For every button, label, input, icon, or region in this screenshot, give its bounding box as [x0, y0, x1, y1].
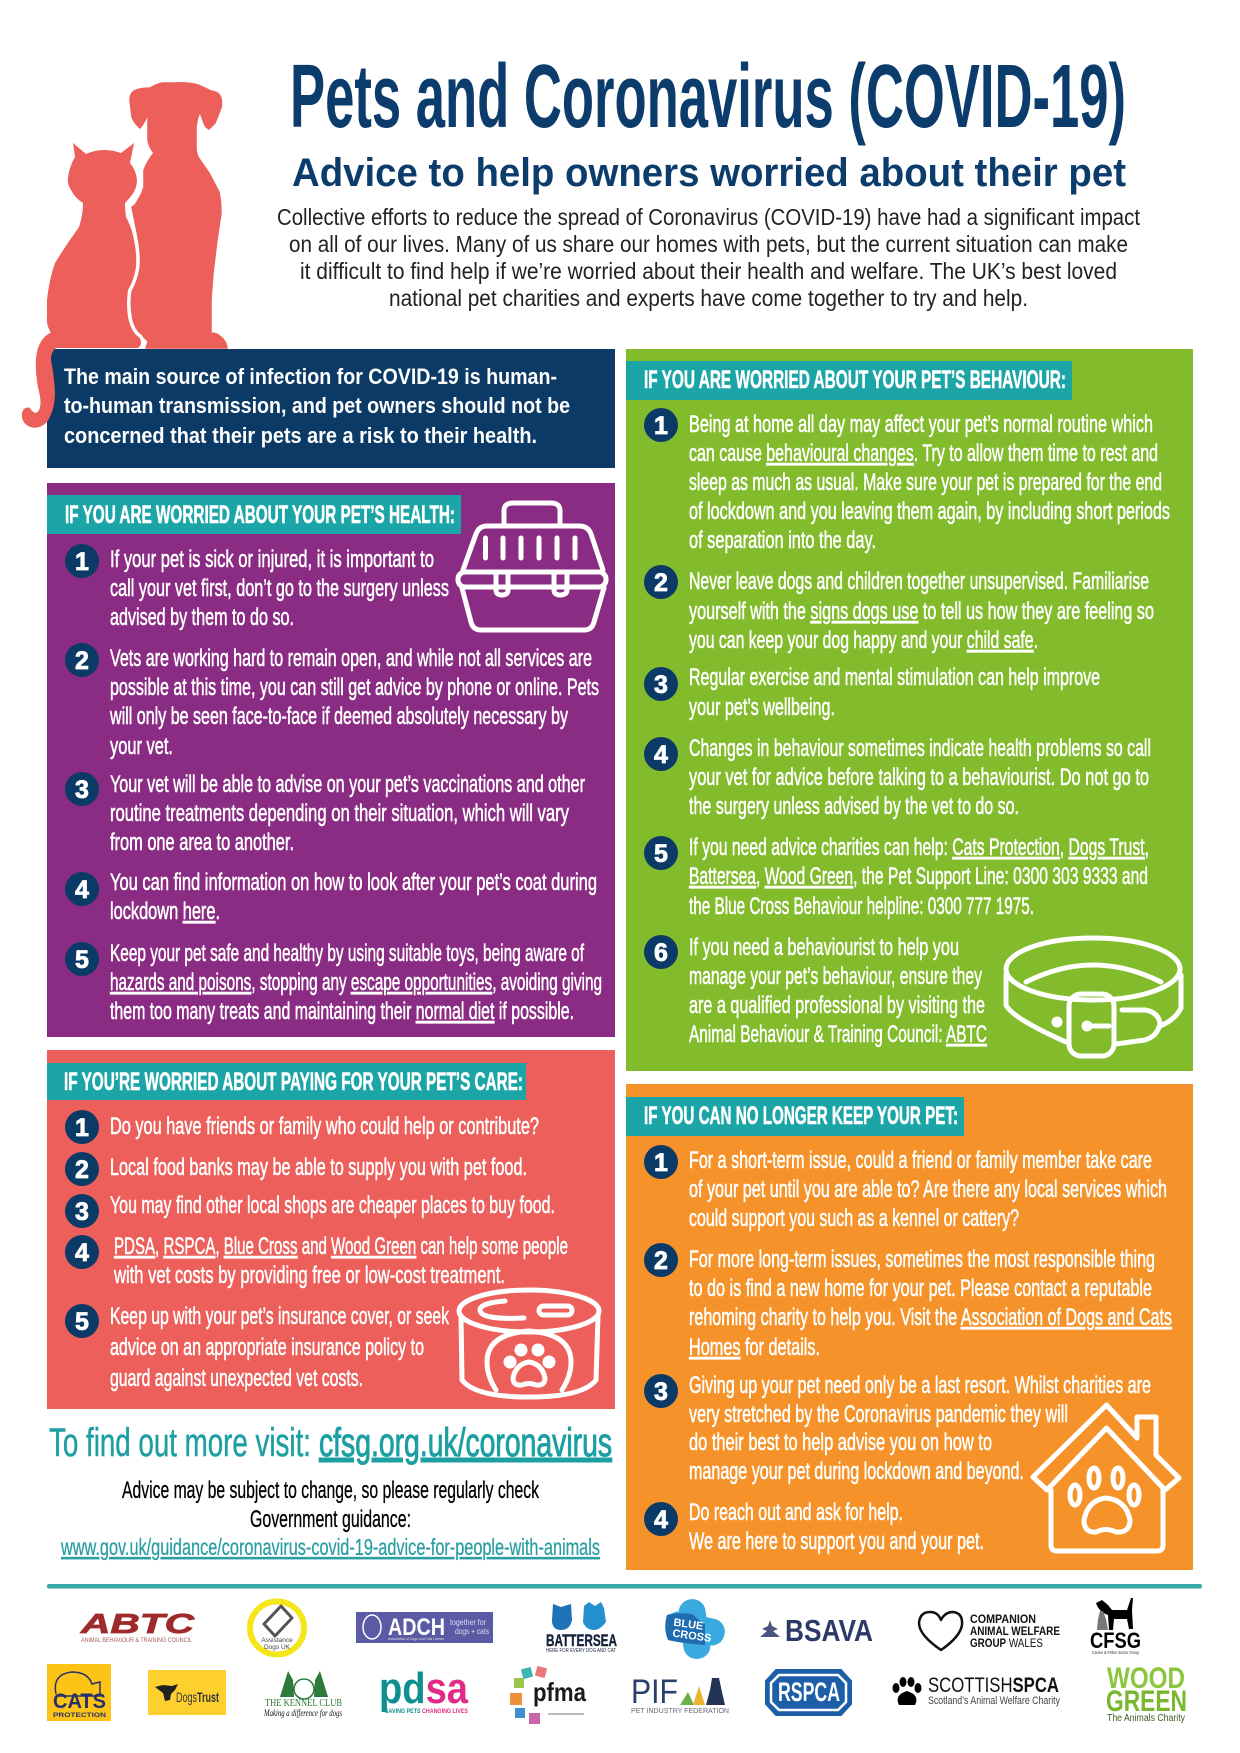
behaviour item 3: your pet’s wellbeing.: [689, 694, 835, 721]
logo: Battersea: [546, 1602, 617, 1654]
subtitle: Advice to help owners worried about their pet: [292, 151, 1126, 195]
paying item 1: Do you have friends or family who could help or contribute?: [110, 1113, 539, 1140]
behaviour item 6: are a qualified professional by visiting the: [689, 992, 985, 1019]
health item 1: If your pet is sick or injured, it is important to: [110, 546, 434, 573]
health item 2: Vets are working hard to remain open, and while not all services are: [110, 645, 592, 672]
logo: Cats Protection: CATS: [53, 1690, 106, 1713]
logo: Assistance Dogs UK: Assistance: [261, 1637, 293, 1644]
logo: CFSG: [1090, 1598, 1141, 1655]
illustration: cat tail: [22, 332, 58, 428]
logo: Assistance Dogs UK: [250, 1602, 304, 1654]
icon: pet carrier: [458, 503, 606, 630]
icon: collar: [1006, 938, 1181, 1056]
logo: ADCH: Association of Dogs and Cats Homes: [388, 1636, 444, 1641]
health item 2: 2: [75, 647, 89, 675]
paying item 5: advice on an appropriate insurance policy to: [110, 1334, 424, 1361]
behaviour item 2: [644, 565, 1154, 654]
heading: behaviour: [626, 361, 1072, 400]
health item 5: 5: [75, 946, 89, 974]
keep item 2: 2: [654, 1247, 668, 1275]
logo: The Kennel Club: [263, 1671, 342, 1718]
logo: Battersea: HERE FOR EVERY DOG AND CAT: [546, 1648, 616, 1654]
logo: Scottish SPCA: [892, 1674, 1060, 1707]
logo: RSPCA: [766, 1670, 851, 1715]
keep item 2: [644, 1243, 1172, 1361]
heading: health: IF YOU ARE WORRIED ABOUT YOUR PET’S HEALTH:: [65, 501, 455, 529]
logo: ADCH: together for: [450, 1618, 486, 1627]
paying item 1: 1: [75, 1114, 89, 1142]
illustration: dog silhouette: [130, 83, 227, 348]
keep item 4: We are here to support you and your pet.: [689, 1528, 984, 1555]
paying item 4: 4: [75, 1239, 89, 1267]
logo: ADCH: ADCH: [388, 1614, 445, 1641]
health item 3: from one area to another.: [110, 829, 294, 856]
logo: PDSA: pdsa: [379, 1664, 468, 1713]
health item 1: call your vet first, don’t go to the surgery unless: [110, 575, 449, 602]
behaviour item 1: 1: [654, 412, 668, 440]
logo: Wood Green: WOOD: [1107, 1662, 1185, 1695]
note: government guidance: Government guidance:: [250, 1506, 411, 1533]
note: government guidance: www.gov.uk/guidance/coronavirus-covid-19-advice-for-people-with-animals: [60, 1534, 600, 1560]
keep item 3: do their best to help advise you on how to: [689, 1429, 992, 1456]
health item 5: hazards and poisons, stopping any escape opportunities, avoiding giving: [110, 969, 602, 996]
paying item 5: [65, 1303, 450, 1392]
intro text: on all of our lives. Many of us share our homes with pets, but the current situation can make: [289, 231, 1128, 257]
logo: Dogs Trust: [148, 1670, 226, 1715]
logo: Scottish SPCA: Scotland’s Animal Welfare Charity: [928, 1695, 1060, 1707]
logo: Blue Cross: BLUE: [673, 1617, 704, 1633]
logo: The Kennel Club: Making a difference for dogs: [263, 1708, 342, 1718]
keep item 3: very stretched by the Coronavirus pandemic they will: [689, 1401, 1068, 1428]
behaviour item 5: [644, 834, 1149, 920]
panel: key message: to-human transmission, and pet owners should not be: [64, 393, 570, 418]
logo: Cats Protection: [47, 1664, 111, 1721]
behaviour item 6: If you need a behaviourist to help you: [689, 934, 959, 961]
health item 4: lockdown here.: [110, 898, 220, 925]
keep item 4: 4: [654, 1506, 668, 1534]
logo: Dogs Trust: DogsTrust: [176, 1689, 219, 1705]
behaviour item 5: the Blue Cross Behaviour helpline: 0300 777 1975.: [689, 893, 1034, 920]
logo: CFSG: Canine & Feline Sector Group: [1092, 1650, 1139, 1655]
logo: Wood Green: GREEN: [1106, 1685, 1187, 1718]
keep item 3: manage your pet during lockdown and beyond.: [689, 1458, 1024, 1485]
health item 4: 4: [75, 876, 89, 904]
behaviour item 4: the surgery unless advised by the vet to do so.: [689, 793, 1019, 820]
logo: Battersea: BATTERSEA: [546, 1631, 617, 1650]
behaviour item 5: 5: [654, 840, 668, 868]
logo: BSAVA: [760, 1613, 873, 1648]
call to action: find out more: [49, 1421, 612, 1465]
paying item 2: [65, 1152, 527, 1186]
panel: key message: The main source of infection for COVID-19 is human-: [64, 364, 557, 389]
paying item 5: 5: [75, 1308, 89, 1336]
call to action: find out more: To find out more visit:: [49, 1421, 311, 1465]
intro text: it difficult to find help if we’re worried about their health and welfare. The UK’s best loved: [300, 258, 1117, 284]
panel: health: [47, 483, 615, 1037]
logo: Pet Industry Federation: PET INDUSTRY FEDERATION: [631, 1708, 729, 1715]
icon: house with paw: [1033, 1405, 1179, 1551]
health item 3: 3: [75, 776, 89, 804]
panel: behaviour: [626, 349, 1193, 1071]
behaviour item 3: [644, 664, 1100, 721]
health item 4: [65, 869, 597, 925]
logo: CFSG: CFSG: [1090, 1628, 1141, 1653]
behaviour item 5: If you need advice charities can help: Cats Protection, Dogs Trust,: [689, 834, 1149, 861]
note: government guidance: [60, 1477, 600, 1560]
logo: ADCH: dogs + cats: [455, 1627, 489, 1636]
health item 3: Your vet will be able to advise on your pet’s vaccinations and other: [110, 771, 585, 798]
health item 4: You can find information on how to look after your pet’s coat during: [110, 869, 597, 896]
health item 5: Keep your pet safe and healthy by using suitable toys, being aware of: [110, 940, 584, 967]
behaviour item 4: 4: [654, 741, 668, 769]
logo: ABTC: ABTC: [80, 1608, 195, 1639]
panel: key message: [47, 349, 615, 468]
logo: PDSA: SAVING PETS CHANGING LIVES: [385, 1708, 469, 1715]
logo: Wood Green: [1106, 1662, 1187, 1724]
keep item 4: Do reach out and ask for help.: [689, 1499, 903, 1526]
logo: Blue Cross: [663, 1597, 727, 1661]
logo: Wood Green: The Animals Charity: [1107, 1713, 1185, 1724]
paying item 4: with vet costs by providing free or low-cost treatment.: [113, 1262, 505, 1289]
paying item 4: [65, 1233, 568, 1289]
keep item 3: [644, 1372, 1151, 1485]
keep item 1: 1: [654, 1149, 668, 1177]
logo: The Kennel Club: THE KENNEL CLUB: [265, 1698, 342, 1709]
intro text: national pet charities and experts have come together to try and help.: [389, 285, 1028, 311]
behaviour item 6: [644, 934, 987, 1048]
logo: Companion Animal Welfare Group Wales: [919, 1612, 1060, 1650]
logo: Companion Animal Welfare Group Wales: COMPANION: [970, 1614, 1036, 1626]
paying item 5: Keep up with your pet’s insurance cover, or seek: [110, 1303, 450, 1330]
health item 5: them too many treats and maintaining their normal diet if possible.: [110, 998, 574, 1025]
health item 5: [65, 940, 602, 1025]
logo: ABTC: [80, 1608, 195, 1644]
behaviour item 1: of separation into the day.: [689, 527, 876, 554]
panel: paying for care: [47, 1050, 615, 1409]
paying item 2: 2: [75, 1156, 89, 1184]
heading: keep: IF YOU CAN NO LONGER KEEP YOUR PET:: [644, 1102, 958, 1130]
behaviour item 2: 2: [654, 569, 668, 597]
icon: pet food can: [459, 1290, 599, 1397]
logo: Cats Protection: PROTECTION: [53, 1712, 106, 1719]
intro text: Collective efforts to reduce the spread of Coronavirus (COVID-19) have had a significant impact: [277, 204, 1141, 230]
heading: paying: IF YOU’RE WORRIED ABOUT PAYING FOR YOUR PET’S CARE:: [64, 1068, 523, 1096]
logo: ABTC: ANIMAL BEHAVIOUR & TRAINING COUNCIL: [81, 1637, 192, 1644]
behaviour item 6: 6: [654, 939, 668, 967]
logo: PFMA: [510, 1666, 586, 1724]
behaviour item 4: [644, 735, 1151, 820]
logo: Companion Animal Welfare Group Wales: GROUP WALES: [970, 1638, 1043, 1650]
keep item 4: [644, 1499, 984, 1555]
paying item 3: 3: [75, 1198, 89, 1226]
behaviour item 6: Animal Behaviour & Training Council: ABTC: [689, 1021, 987, 1048]
health item 3: [65, 771, 585, 856]
intro text: [277, 204, 1141, 311]
health item 1: [65, 544, 449, 631]
heading: paying: [47, 1063, 526, 1100]
logo: BSAVA: BSAVA: [785, 1613, 873, 1648]
paying item 3: [65, 1192, 555, 1228]
panel: key message: concerned that their pets are a risk to their health.: [64, 423, 537, 448]
note: government guidance: Advice may be subject to change, so please regularly check: [122, 1477, 540, 1504]
heading: keep: [626, 1097, 964, 1136]
paying item 2: Local food banks may be able to supply you with pet food.: [110, 1154, 527, 1181]
heading: health: [47, 495, 461, 534]
logo: Blue Cross: CROSS: [672, 1628, 712, 1645]
paying item 5: guard against unexpected vet costs.: [110, 1365, 363, 1392]
behaviour item 2: you can keep your dog happy and your child safe.: [689, 627, 1038, 654]
logo: Scottish SPCA: SCOTTISHSPCA: [928, 1674, 1059, 1697]
keep item 2: Homes for details.: [689, 1334, 820, 1361]
logo: ADCH: [356, 1612, 493, 1643]
behaviour item 3: 3: [654, 671, 668, 699]
paying item 3: You may find other local shops are cheaper places to buy food.: [110, 1192, 555, 1219]
logo: RSPCA: RSPCA: [778, 1677, 840, 1707]
divider line: [47, 1584, 1202, 1588]
logo: PFMA: pfma: [533, 1677, 586, 1707]
health item 1: 1: [75, 548, 89, 576]
health item 3: routine treatments depending on their situation, which will vary: [110, 800, 569, 827]
logos: supporting organisations: [47, 1597, 1187, 1724]
health item 2: will only be seen face-to-face if deemed absolutely necessary by: [109, 703, 568, 730]
panel: can no longer keep: [626, 1084, 1193, 1570]
behaviour item 1: [644, 408, 1170, 554]
call to action: find out more: cfsg.org.uk/coronavirus: [319, 1421, 612, 1465]
logo: Assistance Dogs UK: Dogs UK: [264, 1644, 291, 1651]
illustration: cat silhouette: [47, 143, 141, 348]
logo: Pet Industry Federation: [631, 1673, 729, 1715]
behaviour item 6: manage your pet’s behaviour, ensure they: [689, 963, 982, 990]
keep item 1: [644, 1145, 1167, 1232]
keep item 1: could support you such as a kennel or cattery?: [689, 1205, 1019, 1232]
health item 2: [65, 643, 599, 760]
paying item 1: [65, 1110, 539, 1144]
logo: Pet Industry Federation: PIF: [631, 1673, 678, 1711]
logo: Companion Animal Welfare Group Wales: ANIMAL WELFARE: [970, 1626, 1060, 1638]
health item 2: possible at this time, you can still get advice by phone or online. Pets: [110, 674, 599, 701]
health item 1: advised by them to do so.: [110, 604, 294, 631]
health item 2: your vet.: [110, 733, 173, 760]
paying item 4: PDSA, RSPCA, Blue Cross and Wood Green can help some people: [114, 1233, 568, 1260]
keep item 3: 3: [654, 1378, 668, 1406]
